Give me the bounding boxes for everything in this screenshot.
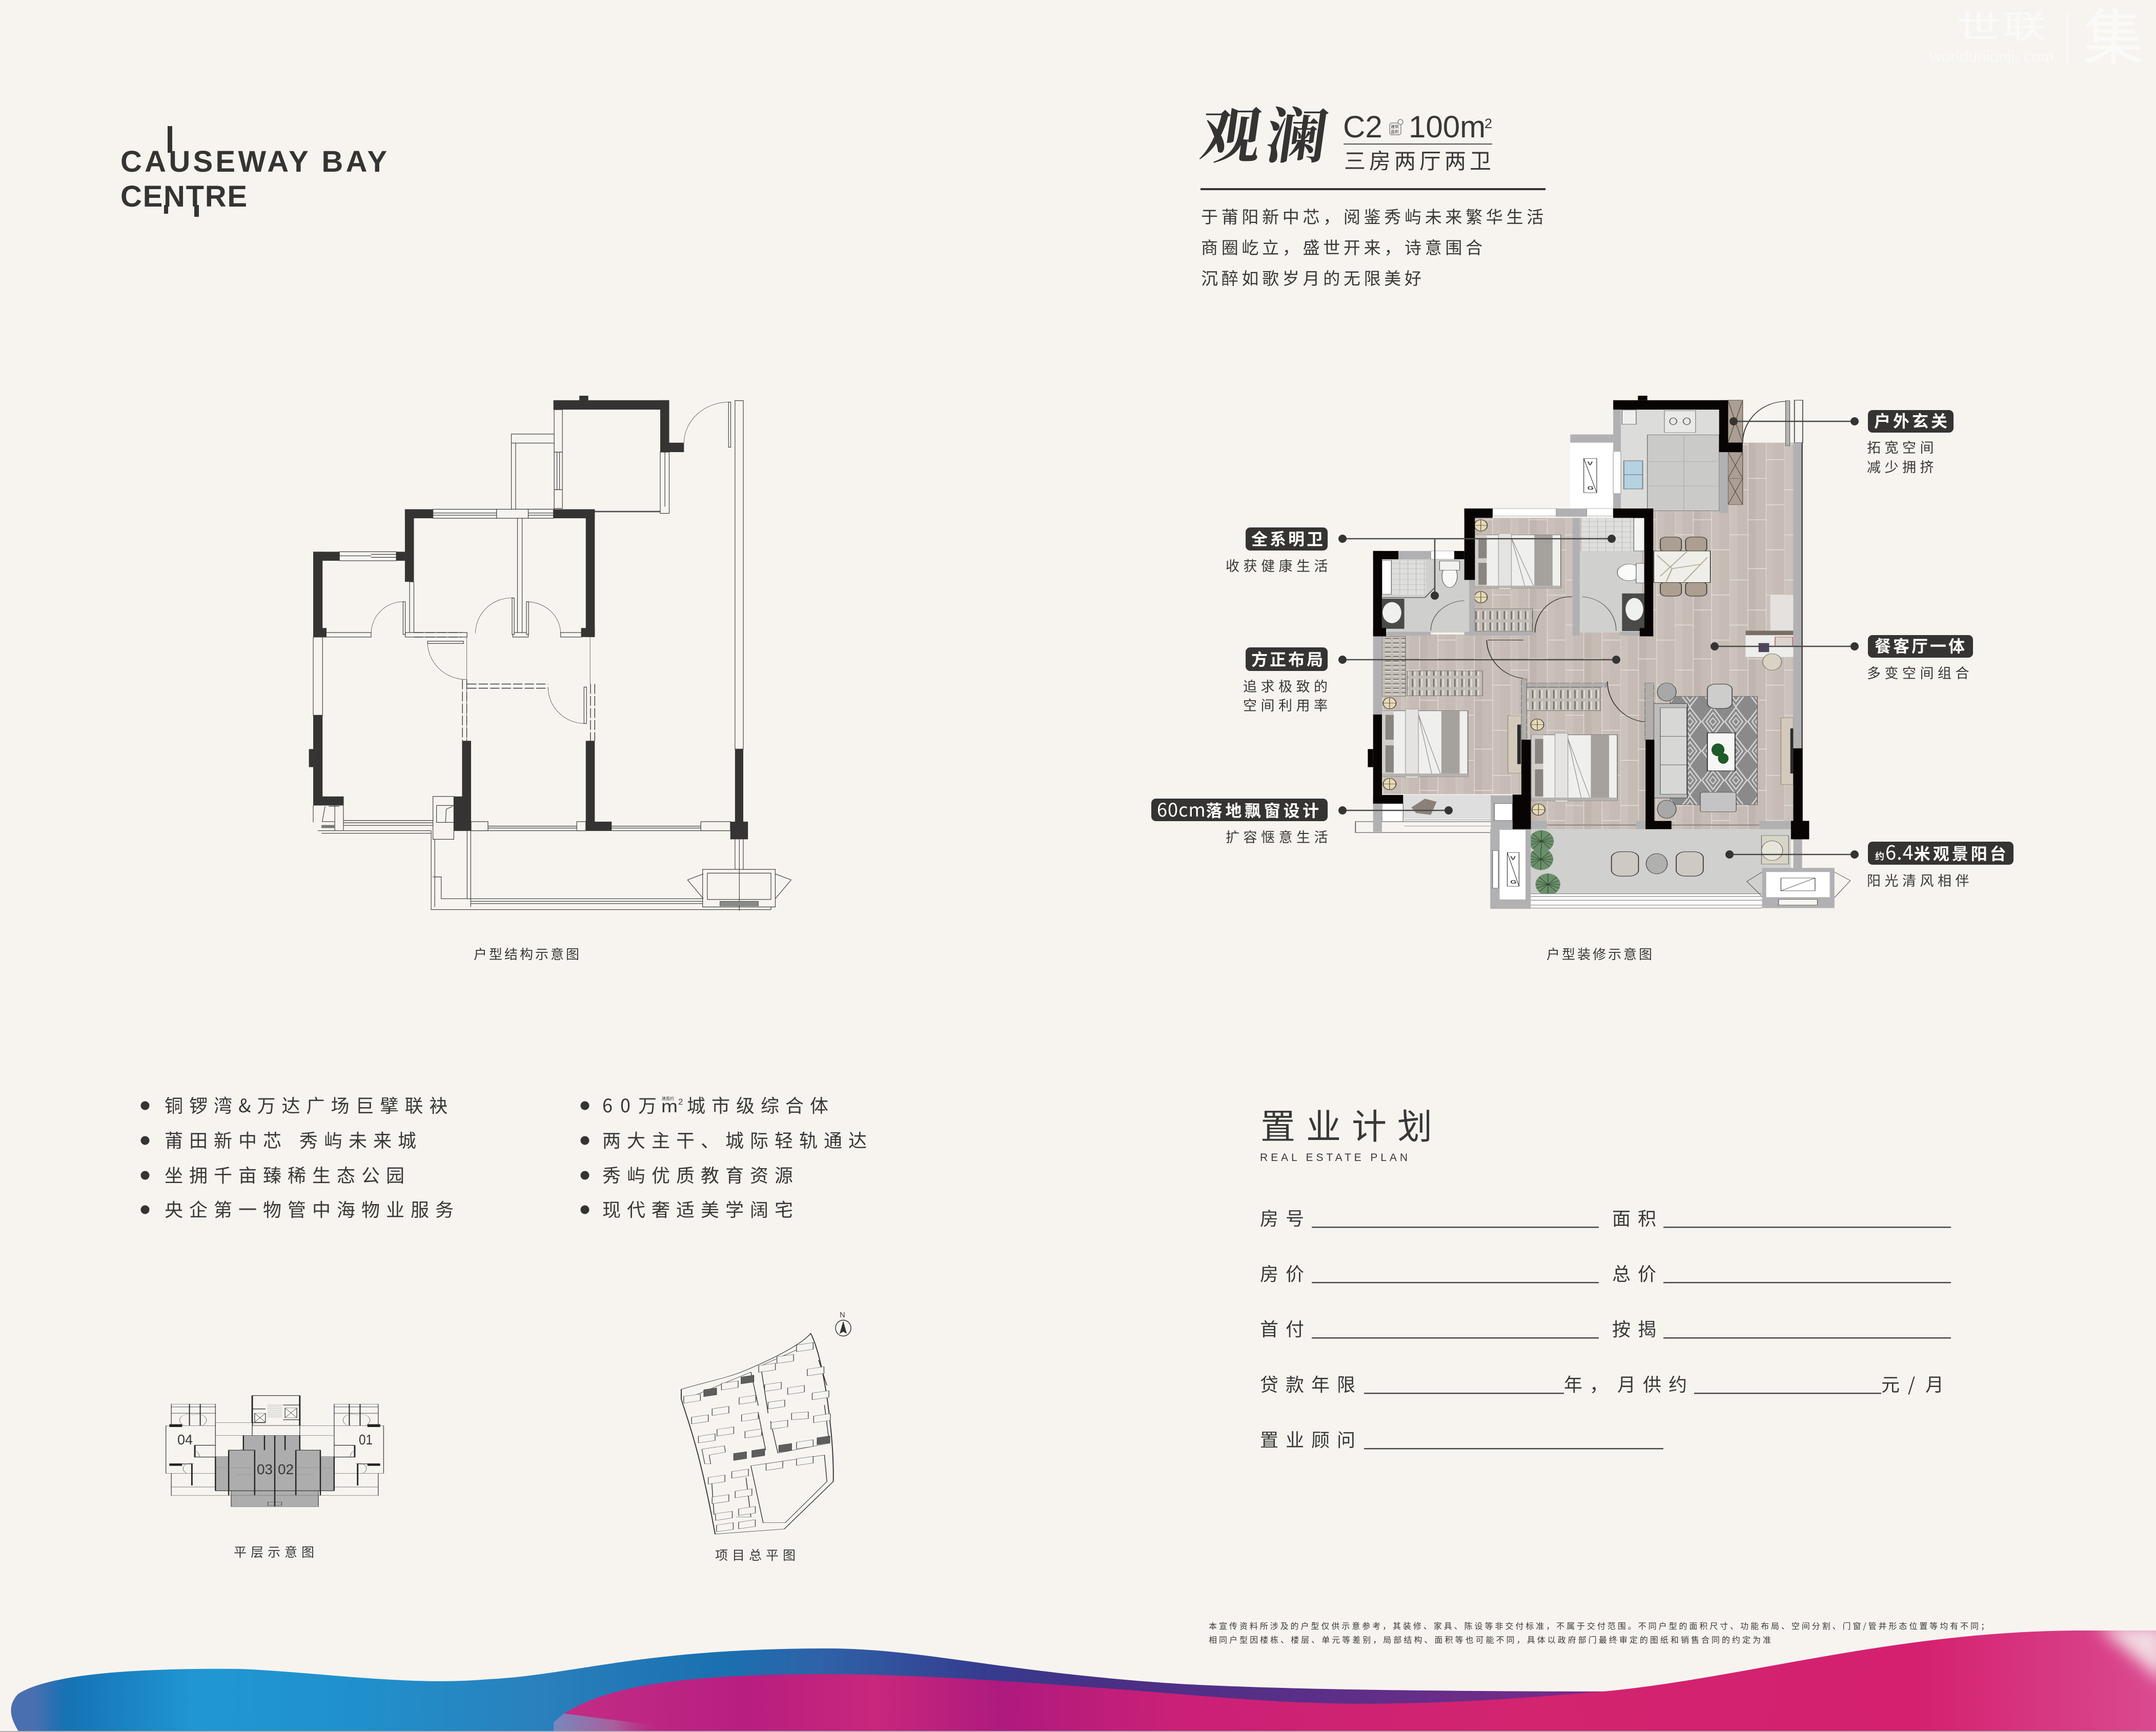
unit type and area: 100m bbox=[1409, 110, 1486, 144]
air conditioner ledge bbox=[687, 839, 791, 911]
callout: bay window: 扩容惬意生活 bbox=[1226, 826, 1332, 846]
bottom wave: magenta bbox=[554, 1631, 2156, 1732]
selling points: right column: m bbox=[661, 1097, 678, 1116]
study desk bbox=[1745, 595, 1793, 670]
light buildings bbox=[684, 1342, 830, 1532]
decorated floor plan bbox=[1355, 396, 1850, 909]
typical floor key plan bbox=[166, 1396, 383, 1506]
callout: square layout: 方正布局 bbox=[1251, 647, 1325, 670]
black walls bbox=[1368, 396, 1809, 839]
purchase plan form: / bbox=[1908, 1370, 1922, 1397]
site boundary and roads bbox=[681, 1333, 833, 1534]
purchase plan form: 月供约 bbox=[1617, 1370, 1694, 1397]
purchase plan form: 年， bbox=[1564, 1370, 1615, 1397]
icon: north arrow bbox=[836, 1311, 851, 1336]
watermark: 世联集: 世联 bbox=[1957, 1, 2048, 47]
core and unit walls bbox=[215, 1396, 334, 1506]
callout: living and dining bbox=[1711, 634, 1973, 682]
callout: square layout: 追求极致的 bbox=[1243, 676, 1332, 696]
balcony bbox=[1490, 829, 1850, 909]
selling points: right column: 两大主干、城际轻轨通达 bbox=[602, 1126, 873, 1153]
callout: outdoor entry: 拓宽空间 bbox=[1867, 437, 1938, 457]
selling points: left column: 莆田新中芯 bbox=[165, 1126, 288, 1153]
purchase plan form: 按揭 bbox=[1612, 1315, 1663, 1341]
callout: balcony: 约 bbox=[1875, 849, 1884, 863]
load-bearing walls bbox=[309, 396, 748, 839]
selling points: left column: 坐拥千亩臻稀生态公园 bbox=[165, 1161, 411, 1188]
intro text: 于莆阳新中芯，阅鉴秀屿未来繁华生活 bbox=[1201, 203, 1547, 228]
icon: gross floor area badge: 面积 bbox=[1391, 129, 1399, 135]
typical floor key plan: 04 bbox=[177, 1432, 193, 1448]
callout: balcony: 阳光清风相伴 bbox=[1867, 870, 1973, 890]
unit type and area: C2 bbox=[1343, 110, 1382, 144]
callout: living and dining: 餐客厅一体 bbox=[1875, 634, 1967, 657]
site master plan bbox=[681, 1311, 851, 1534]
intro text bbox=[1201, 203, 1547, 290]
logo: Causeway Bay Centre bbox=[120, 126, 387, 217]
callout: balcony: 6.4米观景阳台 bbox=[1885, 837, 2009, 865]
purchase plan form: 房价 bbox=[1260, 1259, 1311, 1286]
bay window and south windows bbox=[313, 797, 730, 839]
callout: bay window bbox=[1151, 796, 1453, 846]
purchase plan form: 面积 bbox=[1612, 1204, 1663, 1231]
callout: bay window: 60cm落地飘窗设计 bbox=[1157, 796, 1322, 822]
utility shaft: V bbox=[1588, 461, 1593, 466]
disclaimer: 本宣传资料所涉及的户型仅供示意参考，其装修、家具、陈设等非交付标准，不属于交付范围。不同户型的面积尺寸、功能布局、空间分割、门窗/管井形态位置等均有不同； bbox=[1209, 1619, 1989, 1632]
bathroom two bbox=[1580, 518, 1644, 633]
heading: real estate plan: REAL ESTATE PLAN bbox=[1260, 1152, 1408, 1164]
dashed partitions bbox=[414, 633, 595, 741]
callout: bright bathrooms: 收获健康生活 bbox=[1226, 555, 1332, 575]
callout: outdoor entry bbox=[1730, 409, 1954, 476]
selling points: right column: 60万 bbox=[602, 1091, 664, 1118]
purchase plan form: 首付 bbox=[1260, 1315, 1311, 1341]
selling points: left column: 央企第一物管中海物业服务 bbox=[165, 1195, 460, 1222]
selling points: right column: 秀屿优质教育资源 bbox=[602, 1161, 799, 1188]
double-line walls bbox=[313, 401, 743, 749]
callout: outdoor entry: 户外玄关 bbox=[1874, 409, 1950, 432]
selling points: right column: 2 bbox=[678, 1097, 683, 1107]
wave: pale lower-left corner of magenta bbox=[554, 1714, 672, 1732]
watermark: 世联集 bbox=[1929, 0, 2144, 76]
unit type and area: 2 bbox=[1484, 116, 1492, 131]
heading rule bbox=[1201, 188, 1545, 190]
beds and nightstands bbox=[1382, 520, 1617, 815]
intro text: 沉醉如歌岁月的无限美好 bbox=[1201, 265, 1425, 290]
balcony outline bbox=[431, 831, 771, 910]
units 01 and 04 bbox=[166, 1404, 383, 1496]
logo: Causeway Bay Centre: CAUSEWAY BAY bbox=[120, 145, 387, 178]
typical floor key plan: 03 bbox=[257, 1461, 273, 1477]
living room set bbox=[1654, 683, 1793, 818]
selling points: right column bbox=[580, 1091, 873, 1222]
caption: site plan: 项目总平图 bbox=[715, 1545, 800, 1564]
utility shaft: G bbox=[1588, 485, 1594, 491]
callout: living and dining: 多变空间组合 bbox=[1867, 662, 1973, 682]
purchase plan form: 置业顾问 bbox=[1260, 1425, 1362, 1452]
selling points: right column: 城市级综合体 bbox=[687, 1091, 835, 1118]
balcony: G bbox=[1510, 879, 1517, 885]
bathroom one bbox=[1382, 559, 1469, 633]
dark highlighted buildings bbox=[704, 1375, 830, 1460]
purchase plan form: 总价 bbox=[1612, 1259, 1663, 1286]
selling points: right column: 现代奢适美学阔宅 bbox=[602, 1195, 799, 1222]
balcony: V bbox=[1510, 855, 1516, 861]
bay window seat bbox=[1355, 795, 1513, 832]
purchase plan form: 月 bbox=[1925, 1370, 1951, 1397]
callout: bright bathrooms bbox=[1226, 526, 1616, 600]
caption: floor key plan: 平层示意图 bbox=[234, 1542, 318, 1561]
callout: square layout bbox=[1243, 647, 1620, 715]
callout: square layout: 空间利用率 bbox=[1243, 695, 1332, 715]
bottom wave: blue to purple bbox=[11, 1648, 1640, 1732]
disclaimer: 相同户型因楼栋、楼层、单元等差别，局部结构、面积等也可能不同，具体以政府部门最终审定的图纸和销售合同的约定为准 bbox=[1209, 1633, 1771, 1645]
door swings bbox=[371, 402, 730, 724]
callout: bright bathrooms: 全系明卫 bbox=[1251, 526, 1325, 550]
selling points: left column: 铜锣湾&万达广场巨擘联袂 bbox=[165, 1091, 454, 1118]
icon: north arrow: N bbox=[840, 1311, 845, 1319]
caption: decorated plan: 户型装修示意图 bbox=[1547, 944, 1654, 963]
purchase plan form: 贷款年限 bbox=[1260, 1370, 1362, 1397]
gray partitions and windows bbox=[1373, 400, 1803, 869]
structural floor plan bbox=[309, 396, 791, 911]
typical floor key plan: 01 bbox=[359, 1432, 373, 1448]
selling points: right column: 建面约 bbox=[662, 1096, 674, 1102]
logo: Causeway Bay Centre: CENTRE bbox=[120, 180, 247, 213]
shaded units 02 and 03 bbox=[215, 1435, 334, 1506]
heading: real estate plan: 置业计划 bbox=[1260, 1098, 1443, 1149]
disclaimer bbox=[1209, 1619, 1989, 1645]
dining set bbox=[1654, 537, 1711, 596]
unit type and area bbox=[1343, 110, 1495, 175]
title: 观澜: 观澜 bbox=[1195, 88, 1339, 175]
selling points: left column bbox=[140, 1091, 460, 1222]
icon: gross floor area badge: 建筑 bbox=[1391, 124, 1399, 130]
typical floor key plan: 02 bbox=[278, 1461, 294, 1477]
purchase plan form: 元 bbox=[1881, 1370, 1907, 1397]
purchase plan form bbox=[1260, 1204, 1951, 1452]
kitchen bbox=[1621, 410, 1719, 511]
watermark: 世联集: worldunionji. com bbox=[1929, 47, 2054, 65]
wardrobes bbox=[1382, 609, 1600, 711]
purchase plan form: 房号 bbox=[1260, 1204, 1311, 1231]
caption: structure plan: 户型结构示意图 bbox=[474, 944, 581, 963]
wood floor bbox=[1382, 443, 1793, 829]
intro text: 商圈屹立，盛世开来，诗意围合 bbox=[1201, 234, 1486, 259]
wave: faded top-right corner bbox=[2097, 1625, 2156, 1684]
icon: gross floor area badge bbox=[1390, 119, 1403, 135]
callout: outdoor entry: 减少拥挤 bbox=[1867, 456, 1938, 476]
selling points: left column: 秀屿未来城 bbox=[299, 1126, 422, 1153]
bottom edge strip bbox=[0, 1731, 2156, 1732]
utility shaft bbox=[1570, 435, 1621, 508]
callout: balcony bbox=[1725, 837, 2013, 890]
unit type and area: 三房两厅两卫 bbox=[1344, 144, 1495, 175]
